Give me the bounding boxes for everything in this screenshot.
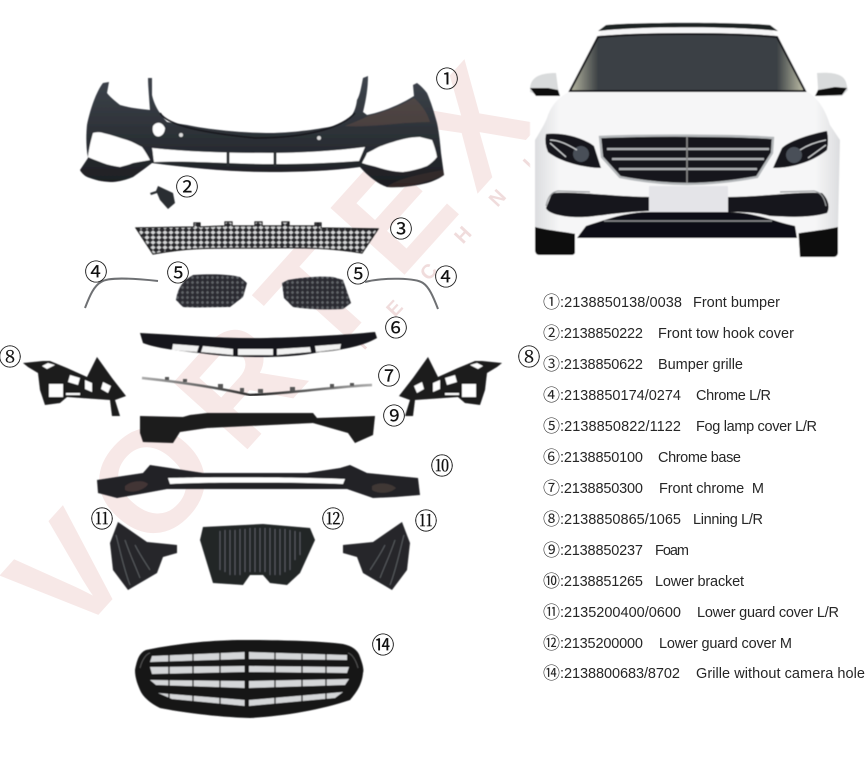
car grille	[600, 136, 773, 184]
marker 4 left: ④	[84, 253, 108, 287]
row 1: :2138850138/0038	[560, 295, 682, 311]
row 4: Chrome L/R	[696, 388, 771, 404]
part 7: front chrome strip	[142, 377, 372, 395]
marker 11 left: ⑪	[90, 501, 114, 534]
row 11: :2135200400/0600	[560, 605, 681, 621]
marker 7: ⑦	[378, 357, 400, 391]
marker 9: ⑨	[382, 397, 406, 431]
part 2: tow hook cover	[150, 186, 175, 209]
part 8: lining right	[399, 357, 502, 416]
part 10: lower bracket	[97, 465, 420, 498]
row 10: Lower bracket	[655, 574, 744, 590]
marker 6: ⑥	[384, 309, 408, 343]
marker 12: ⑫	[322, 501, 344, 534]
car photo	[530, 15, 866, 270]
row 1	[543, 288, 780, 313]
part 4: chrome right	[365, 279, 438, 309]
row 4: :2138850174/0274	[560, 388, 681, 404]
row 12: :2135200000	[560, 636, 643, 652]
car mirrors	[530, 73, 560, 96]
car lower bumper	[577, 212, 797, 238]
row 4	[543, 381, 771, 406]
row 14	[543, 659, 865, 684]
row 7: :2138850300	[560, 481, 643, 497]
row 9: :2138850237	[560, 543, 643, 559]
row 9: ⑨	[543, 536, 560, 561]
row 6: Chrome base	[658, 450, 741, 466]
row 11: ⑪	[543, 598, 560, 623]
row 5: ⑤	[543, 412, 560, 437]
row 9	[543, 536, 689, 561]
row 10: :2138851265	[560, 574, 643, 590]
part 1: front bumper	[80, 76, 444, 187]
row 6: ⑥	[543, 443, 560, 468]
marker 10: ⑩	[430, 448, 454, 481]
row 10: ⑩	[543, 567, 560, 592]
row 6: :2138850100	[560, 450, 643, 466]
row 1: Front bumper	[693, 295, 780, 311]
row 11	[543, 598, 839, 623]
row 2: :2138850222	[560, 326, 643, 342]
car windshield	[570, 34, 805, 91]
row 12: Lower guard cover M	[659, 636, 792, 652]
part 11: lower guard right	[343, 522, 410, 590]
row 14: ⑭	[543, 659, 560, 684]
row 2: Front tow hook cover	[658, 326, 794, 342]
row 3: ③	[543, 350, 560, 375]
part 11: lower guard left	[110, 522, 177, 590]
marker 4 right: ④	[434, 258, 458, 292]
car roof strip	[598, 23, 778, 31]
part 5: fog lamp cover right	[282, 277, 351, 309]
row 1: ①	[543, 288, 560, 313]
part 3: bumper grille	[136, 222, 378, 254]
marker 3: ③	[390, 210, 412, 244]
marker 1: ①	[436, 60, 458, 94]
marker 2: ②	[176, 168, 198, 202]
marker 5 right: ⑤	[346, 255, 370, 289]
watermark: VORTEX: TECHNIQUE	[350, 18, 667, 356]
marker 11 right: ⑪	[414, 503, 438, 536]
row 3	[543, 350, 743, 375]
row 5: Fog lamp cover L/R	[696, 419, 817, 435]
row 12	[543, 629, 792, 654]
marker 8 right: ⑧	[518, 339, 540, 372]
row 2	[543, 319, 794, 344]
row 8: ⑧	[543, 505, 560, 530]
row 5: :2138850822/1122	[560, 419, 681, 435]
row 9: Foam	[655, 543, 689, 559]
part 12: lower guard middle	[200, 524, 315, 585]
marker 14: ⑭	[372, 626, 394, 660]
row 2: ②	[543, 319, 560, 344]
row 3: :2138850622	[560, 357, 643, 373]
row 10	[543, 567, 744, 592]
row 8	[543, 505, 763, 530]
part 14: grille	[135, 640, 363, 718]
row 7: ⑦	[543, 474, 560, 499]
row 11: Lower guard cover L/R	[697, 605, 839, 621]
part 6: chrome base	[140, 332, 377, 357]
row 8: :2138850865/1065	[560, 512, 681, 528]
marker 5 left: ⑤	[166, 254, 190, 288]
car headlights	[545, 134, 601, 168]
car body	[535, 24, 840, 238]
car licence plate	[649, 186, 728, 212]
car lower intakes	[546, 193, 650, 217]
car tyres	[535, 215, 838, 257]
row 5	[543, 412, 817, 437]
part 5: fog lamp cover left	[176, 274, 247, 307]
row 3: Bumper grille	[658, 357, 743, 373]
part 4: chrome left	[85, 278, 158, 308]
part 9: foam	[140, 413, 375, 443]
row 4: ④	[543, 381, 560, 406]
row 7	[543, 474, 764, 499]
row 14: Grille without camera hole	[696, 666, 865, 682]
row 14: :2138800683/8702	[560, 666, 680, 682]
legend: part list	[543, 288, 865, 684]
row 12: ⑫	[543, 629, 560, 654]
part 8: lining left	[23, 357, 126, 416]
row 6	[543, 443, 741, 468]
row 7: Front chrome M	[659, 481, 764, 497]
row 8: Linning L/R	[693, 512, 763, 528]
